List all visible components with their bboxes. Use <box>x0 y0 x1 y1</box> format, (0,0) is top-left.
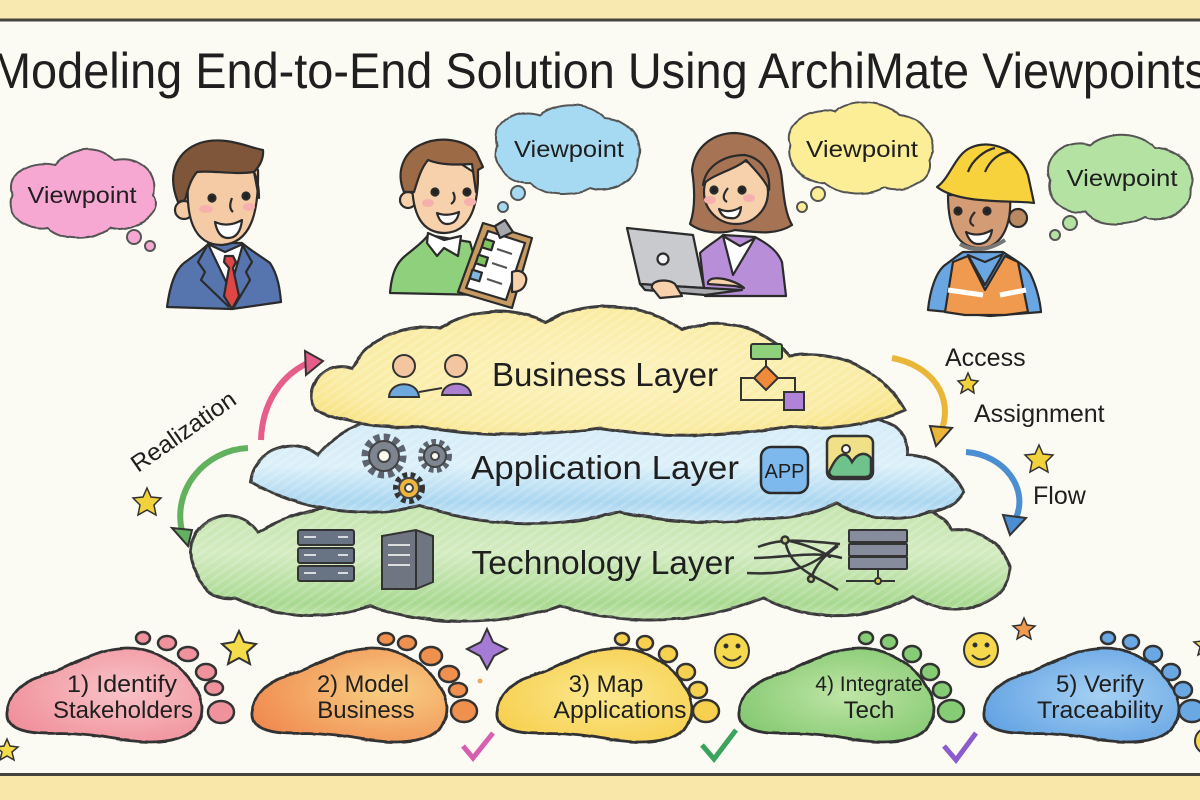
label: technology layer: Technology Layer <box>472 544 735 581</box>
footprint: step 4 <box>739 632 964 742</box>
icon: star purple <box>467 629 507 669</box>
thought bubble: blue viewpoint <box>496 105 640 212</box>
top border band <box>0 0 1200 22</box>
icon: smiley two <box>964 633 998 667</box>
thought bubble: yellow viewpoint: Viewpoint <box>806 136 919 162</box>
footprint: step 3: Applications <box>554 697 686 724</box>
arrow: realization up <box>261 351 323 440</box>
label: access: Access <box>945 344 1026 372</box>
icon: two people <box>389 355 471 397</box>
thought bubble: blue viewpoint: Viewpoint <box>514 136 625 162</box>
icon: star orange <box>1013 618 1035 639</box>
icon: network server <box>846 530 907 584</box>
label: assignment: Assignment <box>974 400 1105 428</box>
footprint: step 2: 2) Model <box>317 671 409 698</box>
footprint: step 3: 3) Map <box>569 671 643 698</box>
thought bubble: pink viewpoint: Viewpoint <box>28 182 137 208</box>
icon: server rack <box>298 530 354 581</box>
icon: star right edge <box>1194 634 1200 655</box>
arrow: realization down <box>172 448 248 546</box>
icon: check purple <box>944 733 976 760</box>
icon: orange dot <box>478 678 482 684</box>
person: developer with laptop <box>627 133 792 298</box>
icon: flow star <box>1025 445 1053 472</box>
icon: small star <box>958 373 978 393</box>
icon: check pink <box>463 733 493 758</box>
label: business layer: Business Layer <box>492 356 718 393</box>
icon: star gold <box>222 631 256 664</box>
cloud: technology layer <box>191 470 1010 621</box>
footprint: step 4: 4) Integrate <box>815 673 923 696</box>
footprint: step 4: Tech <box>844 697 894 724</box>
footprint: step 1: 1) Identify <box>67 671 177 698</box>
icon: flow diagram <box>741 344 804 410</box>
person: engineer with hard hat <box>928 144 1041 316</box>
icon: check green <box>702 730 736 759</box>
footprint: step 1: Stakeholders <box>53 697 193 724</box>
footprint: step 3 <box>497 633 719 742</box>
cloud: business layer <box>312 306 905 435</box>
footprint: step 1 <box>7 632 234 742</box>
icon: app tile: APP <box>764 461 804 483</box>
icon: gears <box>365 437 449 501</box>
cloud: application layer <box>250 378 964 524</box>
icon: smiley right edge <box>1195 728 1200 754</box>
label: flow: Flow <box>1033 482 1087 510</box>
arrow: flow <box>966 452 1026 535</box>
arrow: access <box>892 358 952 446</box>
icon: star bottom left <box>0 739 18 760</box>
icon: network cables <box>747 536 842 590</box>
bottom border band <box>0 773 1200 800</box>
label: realization: Realization <box>126 386 241 478</box>
icon: smiley one <box>715 634 749 668</box>
icon: picture tile <box>827 436 873 479</box>
icon: app tile <box>761 447 808 493</box>
person: analyst with clipboard <box>390 140 532 308</box>
thought bubble: yellow viewpoint <box>789 103 933 212</box>
footprint: step 5: Traceability <box>1037 697 1163 724</box>
thought bubble: green viewpoint: Viewpoint <box>1066 165 1178 191</box>
footprint: step 2: Business <box>317 697 415 724</box>
icon: server tower <box>382 530 433 589</box>
label: application layer: Application Layer <box>471 449 739 486</box>
icon: star <box>133 488 161 515</box>
person: executive <box>167 140 281 309</box>
footprint: step 2 <box>252 633 477 742</box>
thought bubble: green viewpoint <box>1048 135 1193 240</box>
footprint: step 5 <box>984 632 1200 742</box>
footprint: step 5: 5) Verify <box>1056 671 1144 698</box>
thought bubble: pink viewpoint <box>11 149 155 251</box>
